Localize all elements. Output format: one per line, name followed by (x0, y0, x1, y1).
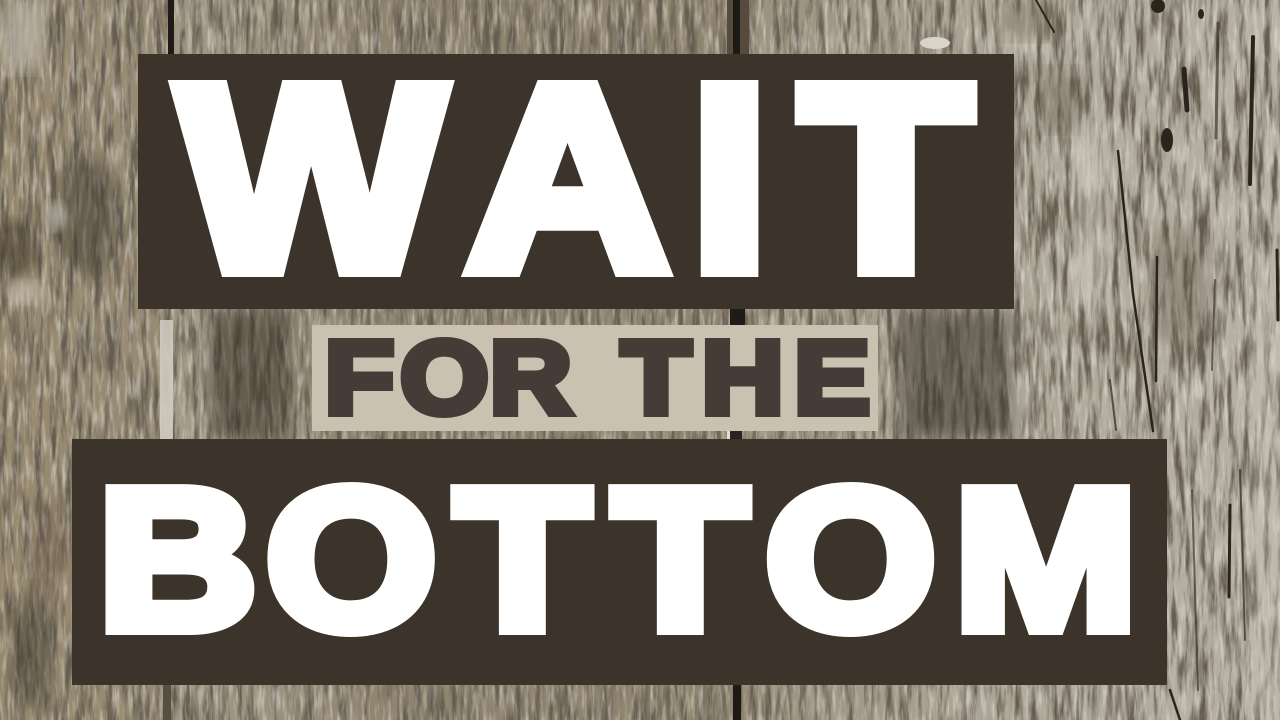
banner: WAIT (138, 30, 1014, 325)
banner: BOTTOM (72, 439, 1167, 685)
banner: FOR THE (312, 320, 878, 435)
heading: WAIT: WAIT (178, 30, 972, 325)
heading: FOR THE: FOR THE (325, 320, 870, 435)
heading: BOTTOM: BOTTOM (99, 449, 1137, 671)
